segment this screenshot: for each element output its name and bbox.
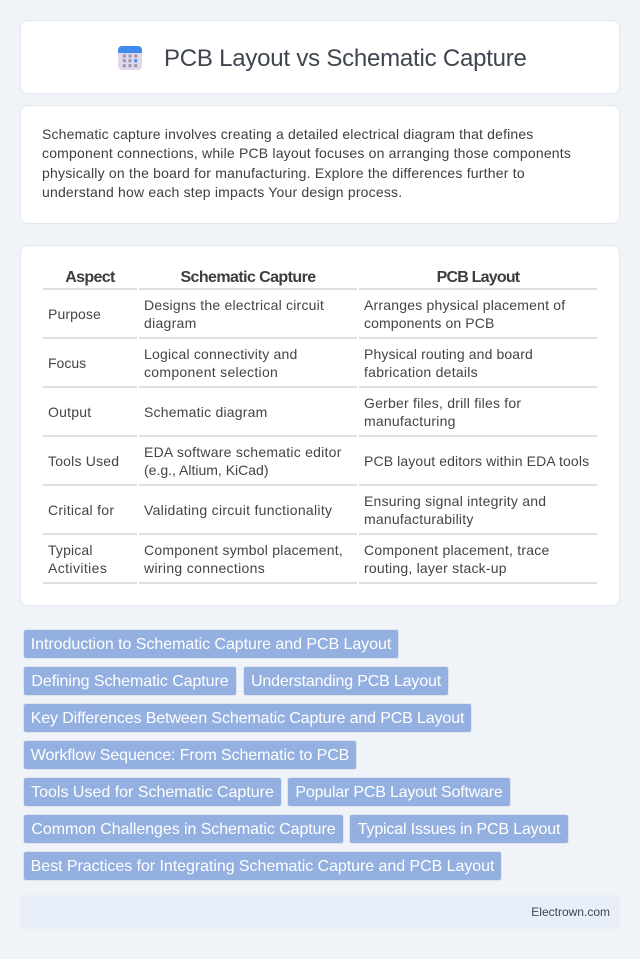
comparison table: Gerber files, drill files for — [364, 395, 521, 411]
description text: understand how each step impacts Your design process. — [42, 184, 402, 200]
comparison table: EDA software schematic editor — [144, 444, 342, 460]
tag — [243, 666, 449, 696]
description text — [42, 126, 571, 200]
comparison table: Ensuring signal integrity and — [364, 493, 546, 509]
title card — [20, 20, 620, 94]
comparison table: wiring connections — [144, 560, 265, 576]
tag: Workflow Sequence: From Schematic to PCB — [31, 747, 349, 764]
comparison table: Component symbol placement, — [144, 542, 343, 558]
tag: Introduction to Schematic Capture and PCB Layout — [31, 636, 391, 653]
icon: calendar grid — [118, 46, 142, 70]
comparison table: Logical connectivity and — [144, 346, 297, 362]
tag — [23, 777, 282, 807]
panel: description — [20, 105, 620, 224]
comparison table: Typical — [48, 542, 93, 558]
description text: physically on the board for manufacturing. Explore the differences further to — [42, 165, 525, 181]
comparison table: Schematic diagram — [144, 404, 268, 420]
tag: Typical Issues in PCB Layout — [358, 821, 560, 838]
panel: comparison table — [20, 245, 620, 606]
tag list — [23, 629, 569, 881]
comparison table: diagram — [144, 315, 197, 331]
description text: Schematic capture involves creating a detailed electrical diagram that defines — [42, 126, 533, 142]
tag — [23, 629, 399, 659]
comparison table: PCB layout editors within EDA tools — [364, 453, 589, 469]
comparison table: (e.g., Altium, KiCad) — [144, 462, 268, 478]
footer — [20, 895, 620, 929]
tag — [23, 703, 472, 733]
tag — [23, 740, 357, 770]
tag — [287, 777, 511, 807]
footer credit: Electrown.com — [531, 905, 610, 919]
tag — [23, 851, 502, 881]
comparison table: manufacturability — [364, 511, 474, 527]
tag — [349, 814, 569, 844]
comparison table: PCB Layout — [437, 269, 519, 286]
comparison table: routing, layer stack-up — [364, 560, 507, 576]
comparison table: Aspect — [65, 269, 115, 286]
comparison table: Critical for — [48, 502, 114, 518]
tag — [23, 666, 237, 696]
comparison table: manufacturing — [364, 413, 456, 429]
comparison table: Designs the electrical circuit — [144, 297, 324, 313]
tag: Best Practices for Integrating Schematic Capture and PCB Layout — [31, 858, 494, 875]
tag: Common Challenges in Schematic Capture — [31, 821, 336, 838]
comparison table: Focus — [48, 355, 86, 371]
comparison table: Arranges physical placement of — [364, 297, 565, 313]
tag: Understanding PCB Layout — [251, 673, 441, 690]
comparison table: Physical routing and board — [364, 346, 533, 362]
tag — [23, 814, 344, 844]
tag: Key Differences Between Schematic Capture and PCB Layout — [31, 710, 464, 727]
comparison table: component selection — [144, 364, 278, 380]
tag: Tools Used for Schematic Capture — [31, 784, 274, 801]
comparison table: fabrication details — [364, 364, 478, 380]
tag: Defining Schematic Capture — [31, 673, 229, 690]
comparison table: Output — [48, 404, 91, 420]
comparison table: Purpose — [48, 306, 101, 322]
comparison table: Schematic Capture — [180, 269, 316, 286]
comparison table: Validating circuit functionality — [144, 502, 332, 518]
comparison table: Activities — [48, 560, 107, 576]
comparison table — [43, 269, 597, 584]
comparison table: Component placement, trace — [364, 542, 549, 558]
tag: Popular PCB Layout Software — [295, 784, 503, 801]
title: PCB Layout vs Schematic Capture — [164, 45, 527, 72]
description text: component connections, while PCB layout focuses on arranging those components — [42, 145, 571, 161]
comparison table: components on PCB — [364, 315, 494, 331]
comparison table: Tools Used — [48, 453, 119, 469]
